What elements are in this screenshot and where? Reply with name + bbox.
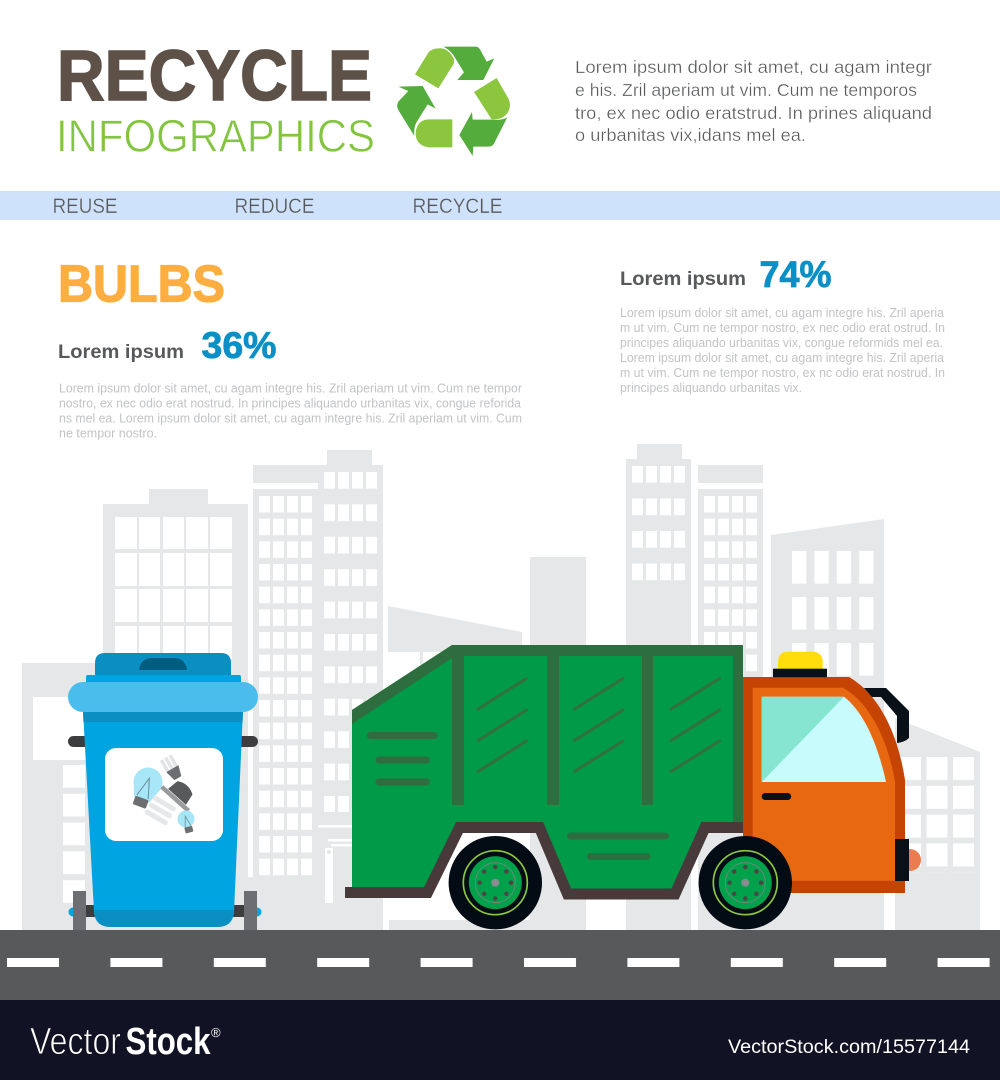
text block: right paragraph: m ut vim. Cum ne tempor nostro, ex nec odio erat ostrud. In <box>620 321 945 335</box>
stat: 74 percent <box>620 254 832 295</box>
icon: small screw bulb <box>160 754 184 782</box>
city skyline background <box>22 444 980 930</box>
building: plain block <box>530 557 586 930</box>
footer bar: Vector <box>30 1021 121 1063</box>
stat: 36 percent <box>58 325 276 366</box>
bin rim <box>68 682 258 712</box>
navigation band: RECYCLE <box>412 195 502 218</box>
building: tower four <box>698 465 763 930</box>
text block: intro paragraph: tro, ex nec odio eratstrud. In prines aliquand <box>575 103 932 123</box>
cab beacon light <box>773 652 827 677</box>
footer bar <box>0 1000 1000 1080</box>
text block: right paragraph: Lorem ipsum dolor sit amet, cu agam integre his. Zril aperia <box>620 306 944 320</box>
bin lid <box>86 653 241 684</box>
text block: intro paragraph <box>575 57 932 145</box>
heading: Bulbs: BULBS <box>58 256 225 314</box>
stat: 36 percent: 36% <box>202 325 276 366</box>
text block: right paragraph <box>620 306 945 395</box>
building: wide window block <box>103 489 253 930</box>
text block: right paragraph: m ut vim. Cum ne tempor nostro, ex nc odio erat nostrud. In <box>620 366 945 380</box>
title: Recycle Infographics: INFOGRAPHICS <box>56 110 375 162</box>
garbage truck <box>345 645 921 929</box>
cab door handle <box>762 793 791 800</box>
text block: intro paragraph: o urbanitas vix,idans mel ea. <box>575 125 806 145</box>
truck cargo body <box>352 645 743 894</box>
building: far left low block <box>22 663 107 930</box>
truck tail light <box>899 849 921 871</box>
navigation band <box>0 191 1000 220</box>
recycling bin <box>68 653 262 930</box>
title: Recycle Infographics <box>56 37 375 162</box>
truck vents <box>370 736 666 856</box>
bin label with bulbs <box>105 748 223 841</box>
text block: intro paragraph: e his. Zril aperiam ut vim. Cum ne temporos <box>575 80 917 100</box>
stat: 74 percent: Lorem ipsum <box>620 268 746 290</box>
cab bumper <box>895 839 909 881</box>
footer bar: ® <box>211 1025 221 1040</box>
cab window <box>762 697 886 782</box>
text block: left paragraph <box>59 382 522 440</box>
text block: left paragraph: ne tempor nostro. <box>59 426 157 440</box>
navigation band: REDUCE <box>234 195 314 218</box>
stat: 36 percent: Lorem ipsum <box>58 341 184 363</box>
icon: recycling symbol <box>397 47 510 156</box>
truck panel slashes <box>478 678 720 772</box>
bin body <box>83 710 243 927</box>
footer bar: VectorStock.com/15577144 <box>728 1037 970 1058</box>
icon: small bulb <box>176 809 198 835</box>
text block: right paragraph: principes aliquando urbanitas vix. <box>620 381 802 395</box>
building: tall tower with entrance <box>253 450 383 930</box>
stat: 74 percent: 74% <box>760 254 832 295</box>
building: sloped roof block <box>388 606 530 930</box>
footer bar: Stock <box>126 1021 211 1063</box>
text block: intro paragraph: Lorem ipsum dolor sit amet, cu agam integr <box>575 57 932 77</box>
building: tower three <box>626 444 691 930</box>
truck front wheel <box>699 836 792 929</box>
icon: compact fluorescent lamp <box>144 774 200 826</box>
bin wheels and axle <box>68 891 262 930</box>
navigation band: REUSE <box>52 195 118 218</box>
text block: right paragraph: principes aliquando urbanitas vix, congue reformids mel ea. <box>620 336 943 350</box>
building: far right block <box>895 718 980 930</box>
text block: right paragraph: Lorem ipsum dolor sit amet, cu agam integre his. Zril aperia <box>620 351 944 365</box>
building: slanted roof block <box>763 519 884 930</box>
title: Recycle Infographics: RECYCLE <box>57 37 372 116</box>
text block: left paragraph: Lorem ipsum dolor sit amet, cu agam integre his. Zril aperiam ut vim. Cum ne tempor <box>59 382 522 396</box>
icon: large bulb <box>125 763 167 811</box>
bin side handles <box>68 736 258 747</box>
truck chassis <box>345 828 743 894</box>
truck rear wheel <box>449 836 542 929</box>
cab mirror <box>864 688 909 743</box>
text block: left paragraph: nostro, ex nec odio erat nostrud. In principes aliquando urbanitas vix, congue reforida <box>59 396 521 410</box>
truck cab <box>743 652 909 893</box>
text block: left paragraph: ns mel ea. Lorem ipsum dolor sit amet, cu agam integre his. Zril aperiam ut vim. Cum <box>59 412 522 426</box>
road <box>0 930 1000 1000</box>
